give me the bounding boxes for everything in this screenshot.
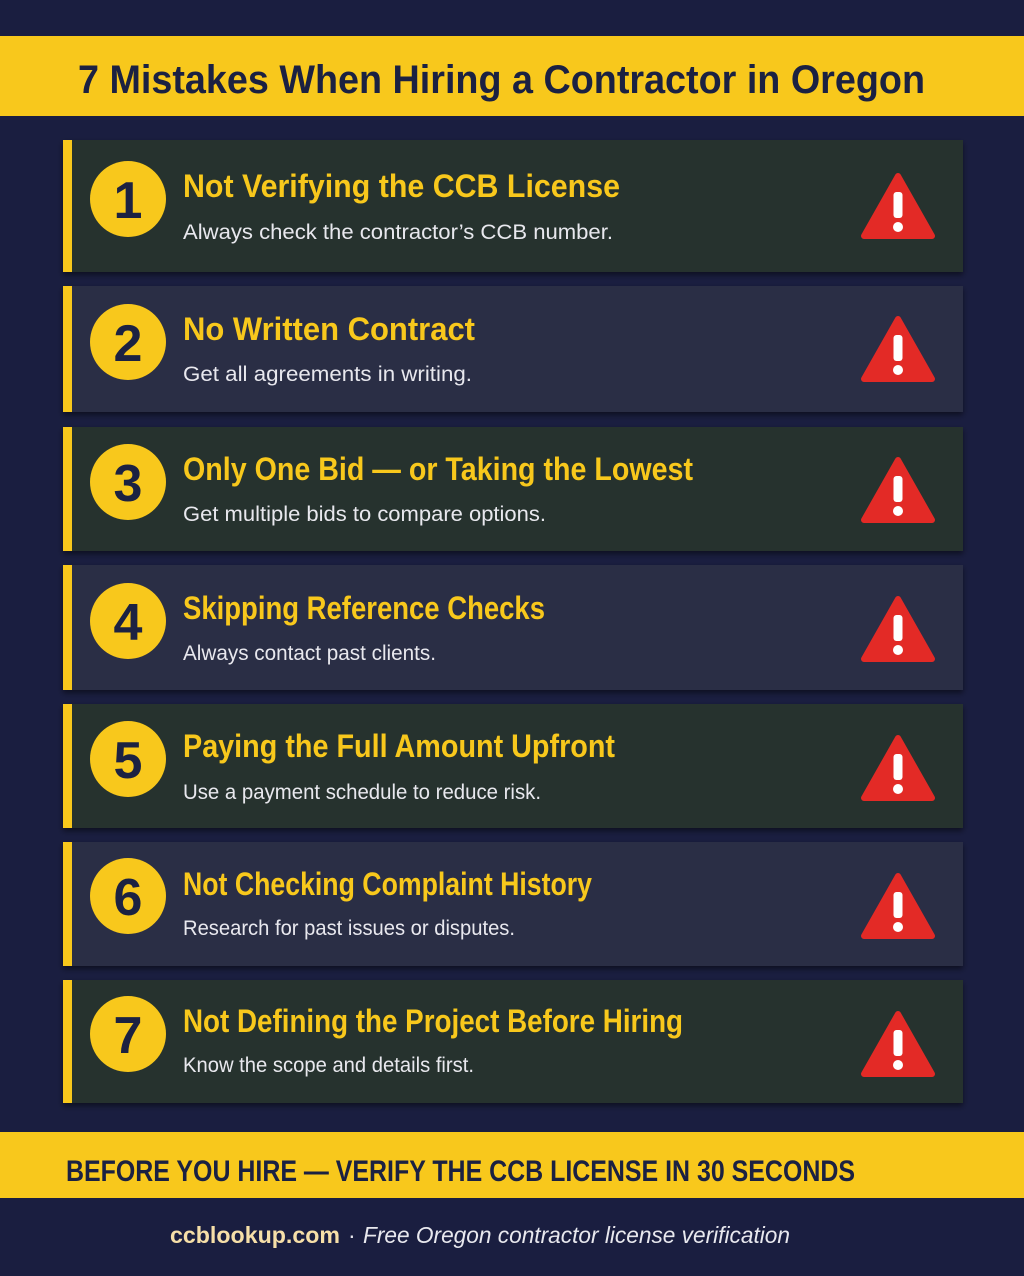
bottom banner [0,1132,1024,1198]
card 2: No Written Contract [183,311,475,347]
card 5: Use a payment schedule to reduce risk. [183,781,541,804]
card 7: Not Defining the Project Before Hiring [183,1003,683,1039]
card 3: Get multiple bids to compare options. [183,503,546,526]
card 2: Get all agreements in writing. [183,363,472,386]
card 1 [63,140,963,272]
card 4: 4 [114,594,143,652]
card 3: 3 [114,455,142,513]
card 7 [63,980,963,1103]
footer [170,1222,790,1248]
card 7: 7 [114,1007,142,1065]
card 2: 2 [114,315,142,373]
card 6: 6 [114,869,142,927]
card 6: Not Checking Complaint History [183,866,592,902]
footer: ccblookup.com [170,1222,340,1248]
title banner [0,36,1024,116]
card 7: Know the scope and details first. [183,1054,474,1077]
title banner: 7 Mistakes When Hiring a Contractor in Oregon [78,58,925,102]
card 5: 5 [114,732,142,790]
card 1: Always check the contractor’s CCB number. [183,221,613,244]
card 6 [63,842,963,966]
card 3 [63,427,963,551]
card 1: 1 [114,172,142,230]
card 1: Not Verifying the CCB License [183,168,620,204]
card 5 [63,704,963,828]
card 4: Skipping Reference Checks [183,590,545,626]
card 4 [63,565,963,690]
card 6: Research for past issues or disputes. [183,917,515,940]
footer: · [348,1222,356,1248]
card 4: Always contact past clients. [183,642,436,665]
card 5: Paying the Full Amount Upfront [183,728,615,764]
bottom banner: BEFORE YOU HIRE — VERIFY THE CCB LICENSE IN 30 SECONDS [66,1155,855,1188]
card 3: Only One Bid — or Taking the Lowest [183,451,693,487]
card 2 [63,286,963,412]
footer: Free Oregon contractor license verification [363,1222,790,1248]
